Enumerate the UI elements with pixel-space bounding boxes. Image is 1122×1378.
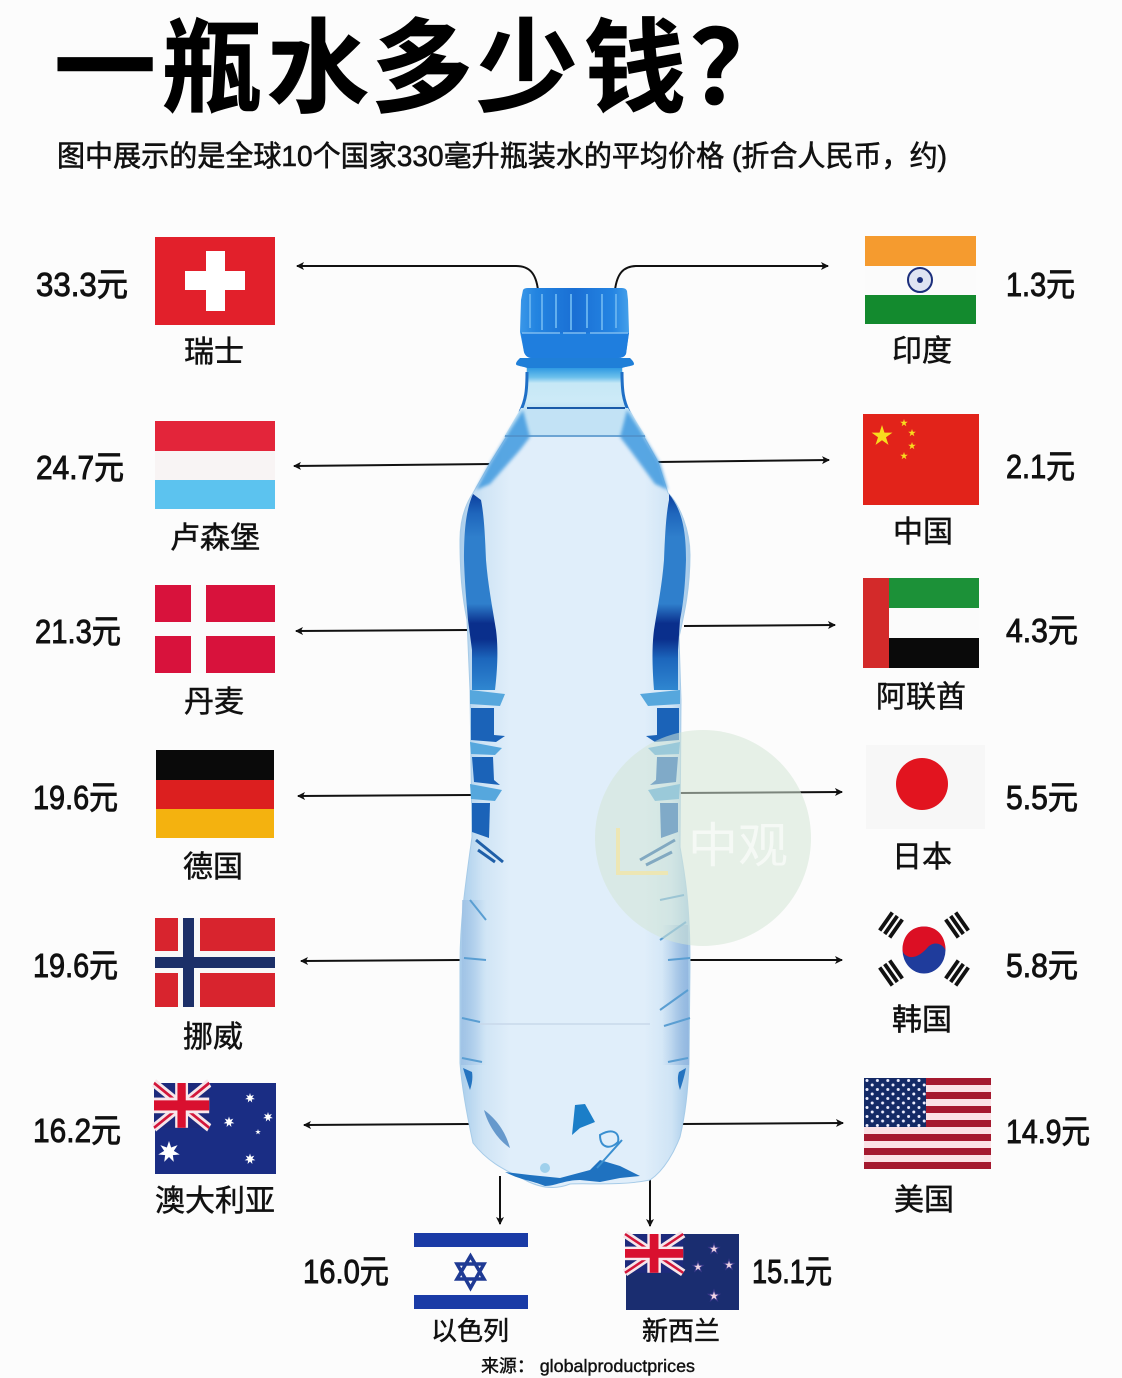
price: 16.0元 [303, 1253, 389, 1290]
neck ring [516, 358, 634, 368]
flag: Luxembourg [155, 421, 275, 509]
price: 19.6元 [33, 947, 118, 984]
watermark logo [618, 828, 668, 873]
ribs [471, 708, 679, 838]
row: Norway [33, 918, 275, 1054]
row: India [865, 236, 1075, 368]
price: 24.7元 [36, 449, 124, 486]
row: Switzerland [36, 237, 275, 369]
left blue panel [464, 494, 497, 690]
price: 15.1元 [752, 1253, 832, 1290]
country name: 德国 [183, 851, 243, 884]
country name: 挪威 [183, 1021, 243, 1054]
subtitle: 图中展示的是全球10个国家330毫升瓶装水的平均价格 (折合人民币，约) [57, 140, 947, 173]
row: New Zealand [625, 1234, 832, 1346]
flag: South Korea [878, 911, 970, 987]
price: 2.1元 [1006, 448, 1075, 485]
flag: New Zealand [625, 1234, 739, 1310]
row: Luxembourg [36, 421, 275, 555]
flag: Israel [414, 1233, 528, 1309]
row: South Korea [878, 911, 1078, 1037]
price: 21.3元 [35, 613, 121, 650]
price: 5.8元 [1006, 947, 1078, 984]
water bottle [460, 288, 690, 1187]
flag: Switzerland [155, 237, 275, 325]
price: 5.5元 [1006, 779, 1078, 816]
price: 16.2元 [33, 1112, 121, 1149]
neck highlight [521, 368, 628, 410]
flag: UAE [863, 578, 979, 668]
country name: 印度 [892, 335, 952, 368]
country name: 瑞士 [184, 336, 244, 369]
country name: 以色列 [431, 1316, 509, 1346]
flag: United States [864, 1078, 991, 1169]
row: United States [864, 1078, 1090, 1217]
bottle body [460, 368, 690, 1187]
country name: 韩国 [892, 1004, 952, 1037]
source note: 来源： globalproductprices [481, 1356, 695, 1376]
country name: 日本 [892, 841, 952, 874]
row: China [863, 414, 1075, 549]
row: Denmark [35, 585, 275, 719]
country name: 阿联酋 [876, 681, 966, 714]
title: 一瓶水多少钱？ [54, 12, 792, 126]
price: 1.3元 [1006, 266, 1075, 303]
lower side tint [461, 900, 486, 1065]
price: 14.9元 [1006, 1113, 1090, 1150]
country name: 中国 [893, 516, 953, 549]
row: UAE [863, 578, 1078, 714]
country name: 美国 [894, 1184, 954, 1217]
watermark circle [595, 730, 811, 946]
flag: India [865, 236, 976, 324]
row: Japan [866, 745, 1078, 874]
price: 33.3元 [36, 266, 128, 303]
bottle cap [520, 288, 629, 358]
row: Germany [33, 750, 274, 884]
price: 4.3元 [1006, 612, 1078, 649]
flag: Japan [866, 745, 985, 829]
country name: 澳大利亚 [155, 1185, 275, 1218]
country name: 丹麦 [184, 686, 244, 719]
flag: Australia [154, 1083, 276, 1174]
country name: 新西兰 [642, 1316, 720, 1346]
country name: 卢森堡 [170, 522, 260, 555]
connector arrows [294, 266, 843, 1226]
row: Australia [33, 1083, 276, 1218]
price: 19.6元 [33, 779, 118, 816]
flag: China [863, 414, 979, 505]
flag: Denmark [155, 585, 275, 673]
watermark text: 中观 [688, 820, 788, 873]
shoulder tint [504, 408, 646, 437]
right blue panel [652, 494, 686, 690]
flag: Germany [156, 750, 274, 838]
flag: Norway [155, 918, 275, 1007]
row: Israel [303, 1233, 528, 1346]
bottle base [484, 1104, 640, 1186]
